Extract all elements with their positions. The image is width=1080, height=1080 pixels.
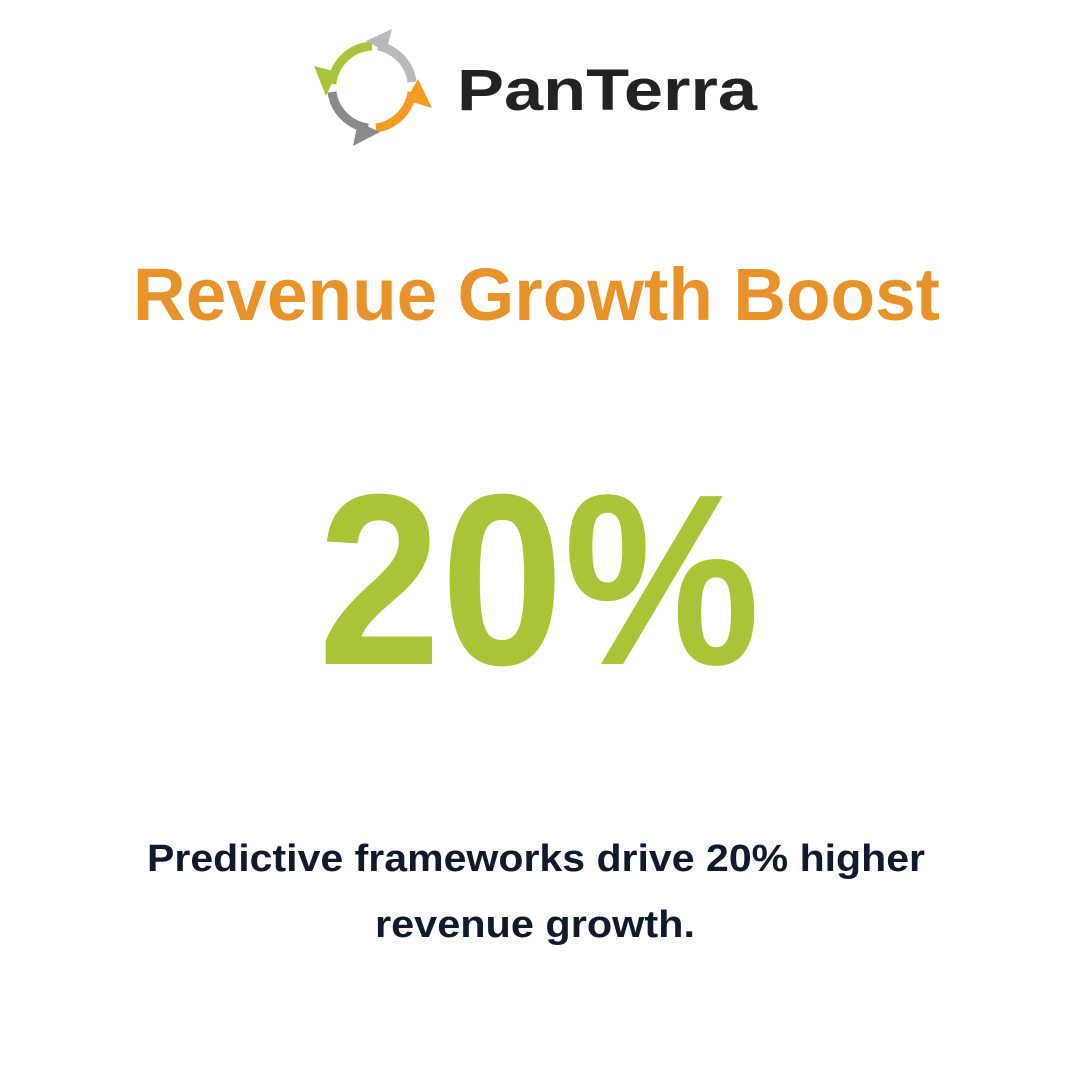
logo: PanTerra	[314, 29, 758, 146]
title: Revenue Growth Boost	[133, 253, 940, 336]
description text: Predictive frameworks drive 20% higher	[147, 838, 925, 880]
logo wordmark: PanTerra	[457, 58, 758, 123]
description text: revenue growth.	[375, 904, 695, 946]
icon: circular arrows	[314, 29, 432, 146]
description text	[147, 838, 925, 946]
big stat: 20%: 20%	[318, 443, 760, 716]
